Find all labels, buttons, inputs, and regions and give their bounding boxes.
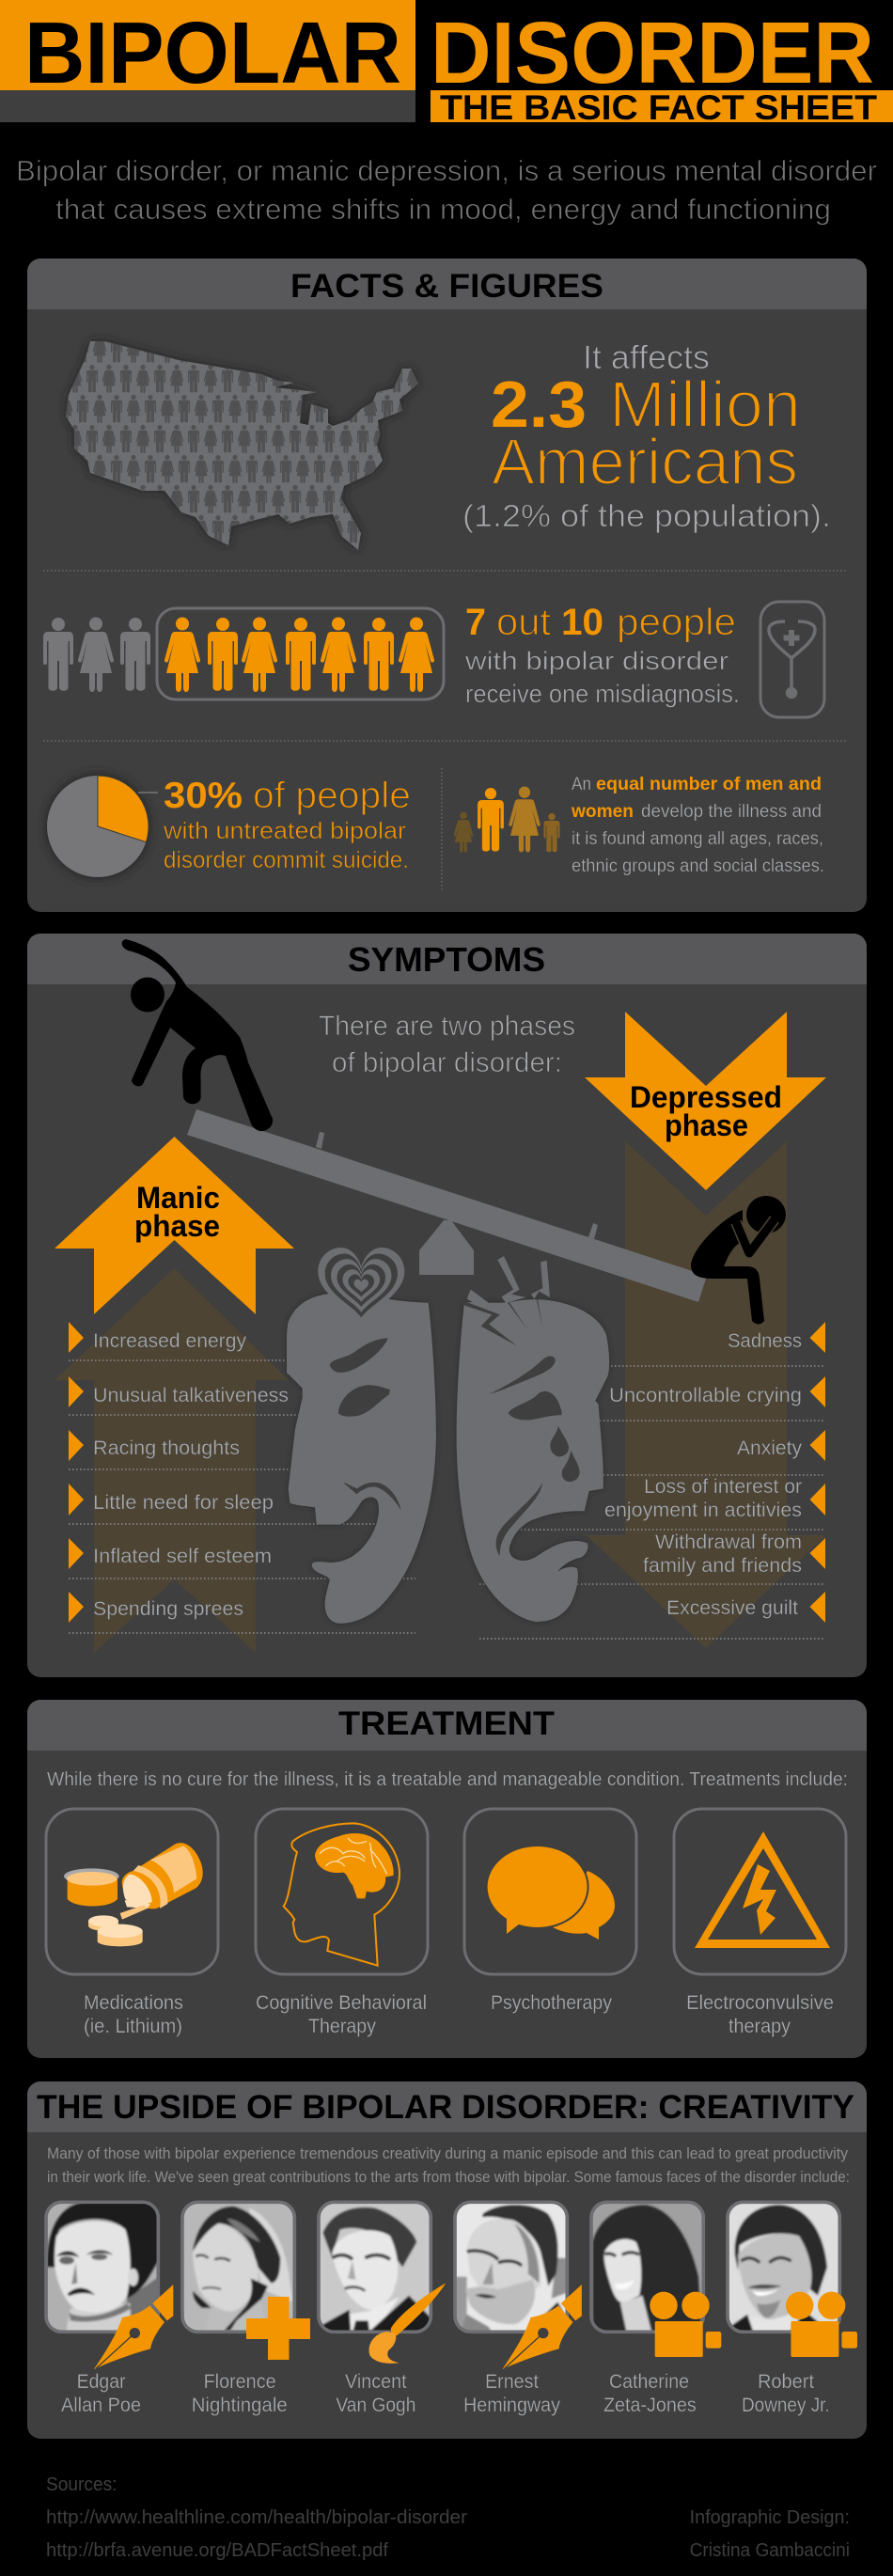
- title word: Bipolar: BIPOLAR: [24, 4, 401, 102]
- footer: sources: [46, 2474, 467, 2561]
- label: psychotherapy: Psychotherapy: [491, 1992, 612, 2014]
- footer: sources: Sources:: [46, 2474, 117, 2495]
- list: depressed symptoms: Excessive guilt: [666, 1597, 798, 1619]
- stat: 2.3 million Americans: 2.3: [491, 368, 587, 441]
- stat: 2.3 million Americans: Million: [609, 368, 801, 441]
- icon: pen nib: [502, 2285, 582, 2369]
- intro text: [16, 154, 877, 226]
- panel: facts and figures: [27, 259, 867, 912]
- list: depressed symptoms: Anxiety: [737, 1437, 802, 1459]
- list: manic symptoms: Inflated self esteem: [93, 1546, 272, 1567]
- label: medications: (ie. Lithium): [84, 2016, 182, 2037]
- label: electroconvulsive therapy: [686, 1992, 834, 2037]
- list: manic symptoms: Increased energy: [93, 1330, 246, 1352]
- stat: misdiagnosis: 7: [465, 602, 486, 643]
- stat: 30 percent suicide: with untreated bipolar: [163, 818, 406, 844]
- text: treatment intro: While there is no cure for the illness, it is a treatable and manageable condition. Treatments include:: [47, 1769, 848, 1790]
- arrow shadow: manic: [55, 1268, 289, 1653]
- list: depressed symptoms: family and friends: [643, 1555, 802, 1577]
- stat: misdiagnosis: 10: [561, 602, 603, 643]
- label: electroconvulsive therapy: therapy: [728, 2016, 791, 2037]
- text: equal number of men and women: develop the illness and: [641, 802, 822, 822]
- footer: credit: Cristina Gambaccini: [690, 2540, 850, 2561]
- list: depressed symptoms: Sadness: [728, 1330, 802, 1352]
- names: Van Gogh: [336, 2395, 415, 2416]
- list: manic symptoms: Spending sprees: [93, 1598, 243, 1620]
- portrait: Edgar Allan Poe: [45, 2202, 159, 2333]
- icon: medical cross: [246, 2297, 310, 2360]
- stat: misdiagnosis: out: [496, 602, 551, 643]
- portrait: Robert Downey Jr.: [727, 2202, 840, 2333]
- names: Zeta-Jones: [603, 2395, 697, 2416]
- list: manic symptoms: Little need for sleep: [93, 1492, 274, 1514]
- footer: sources: http://www.healthline.com/health/bipolar-disorder: [46, 2507, 467, 2528]
- arrow: depressed phase: [585, 1012, 826, 1190]
- text: equal number of men and women: women: [571, 802, 634, 822]
- panel: treatment: [27, 1700, 867, 2058]
- stat: 2.3 million Americans: Americans: [492, 425, 798, 498]
- list: manic symptoms: Racing thoughts: [93, 1437, 240, 1459]
- names: Nightingale: [192, 2395, 288, 2416]
- figure: manic person: [122, 939, 273, 1131]
- list: depressed symptoms: Withdrawal from: [655, 1531, 802, 1553]
- names: Allan Poe: [61, 2395, 141, 2416]
- portrait: Catherine Zeta-Jones: [590, 2202, 704, 2333]
- icon: stethoscope: [760, 602, 824, 717]
- heading: symptoms: SYMPTOMS: [348, 940, 545, 979]
- text: two phases: [319, 1011, 575, 1078]
- list: manic symptoms: Unusual talkativeness: [93, 1385, 289, 1406]
- text: equal number of men and women: [571, 775, 824, 876]
- text: creativity intro: [47, 2144, 850, 2186]
- text: equal number of men and women: ethnic groups and social classes.: [572, 856, 824, 876]
- text: equal number of men and women: equal number of men and: [596, 775, 822, 794]
- icon: pen nib: [94, 2285, 173, 2369]
- footer: credit: [690, 2507, 850, 2561]
- card: electroconvulsive therapy: [674, 1809, 846, 2037]
- icon: pill bottle: [64, 1843, 203, 1946]
- stat: misdiagnosis: receive one misdiagnosis.: [465, 680, 740, 708]
- title word: Disorder: DISORDER: [431, 4, 874, 102]
- icon: movie camera: [650, 2292, 721, 2357]
- list: depressed symptoms: Uncontrollable crying: [609, 1385, 802, 1406]
- label: medications: [84, 1992, 183, 2037]
- card: medications: [46, 1809, 218, 2037]
- arrow: manic phase: phase: [134, 1209, 220, 1243]
- card: psychotherapy: [464, 1809, 636, 2014]
- names: Ernest: [485, 2371, 539, 2393]
- stat: 30 percent suicide: of people: [253, 776, 411, 816]
- footer: credit: Infographic Design:: [690, 2507, 850, 2528]
- portrait: Ernest Hemingway: [454, 2202, 568, 2333]
- names: Vincent: [345, 2371, 407, 2393]
- names: Robert: [758, 2371, 814, 2393]
- arrow: manic phase: [55, 1137, 294, 1314]
- stat: misdiagnosis: with bipolar disorder: [464, 647, 728, 675]
- intro text: Bipolar disorder, or manic depression, is a serious mental disorder: [16, 154, 877, 187]
- icon: head and brain: [284, 1823, 400, 1966]
- label: cognitive behavioral therapy: [256, 1992, 427, 2037]
- stat: 30 percent suicide: disorder commit suicide.: [164, 847, 409, 873]
- figure: depressed person: [691, 1196, 786, 1324]
- portrait: Vincent Van Gogh: [318, 2202, 431, 2333]
- stat: 30 percent suicide: [163, 776, 411, 873]
- stat: 2.3 million Americans: It affects: [583, 339, 710, 376]
- text: equal number of men and women: An: [572, 775, 591, 794]
- stat: 2.3 million Americans: [462, 339, 831, 533]
- icon: speech bubbles: [486, 1845, 615, 1940]
- arrow: depressed phase: Depressed: [630, 1080, 782, 1114]
- arrow: depressed phase: phase: [665, 1108, 748, 1142]
- panel: creativity: [27, 2081, 867, 2439]
- intro text: that causes extreme shifts in mood, energy and functioning: [55, 193, 831, 226]
- names: [61, 2371, 830, 2416]
- footer: sources: http://brfa.avenue.org/BADFactSheet.pdf: [46, 2540, 388, 2561]
- list: depressed symptoms: [604, 1322, 825, 1623]
- header: title banner: [0, 0, 893, 127]
- label: medications: Medications: [84, 1992, 183, 2014]
- label: electroconvulsive therapy: Electroconvulsive: [686, 1992, 834, 2014]
- heading: facts and figures: FACTS & FIGURES: [290, 268, 603, 305]
- names: Edgar: [77, 2371, 126, 2393]
- names: Catherine: [609, 2371, 689, 2393]
- text: equal number of men and women: it is found among all ages, races,: [572, 829, 823, 849]
- portrait: Florence Nightingale: [181, 2202, 295, 2333]
- list: manic symptoms: [69, 1322, 289, 1623]
- list: depressed symptoms: Loss of interest or: [644, 1476, 802, 1498]
- seesaw: [187, 1109, 707, 1302]
- text: two phases: There are two phases: [319, 1011, 575, 1042]
- label: cognitive behavioral therapy: Cognitive Behavioral: [256, 1992, 427, 2014]
- text: two phases: of bipolar disorder:: [332, 1047, 562, 1078]
- heading: treatment: TREATMENT: [338, 1705, 555, 1742]
- names: Hemingway: [463, 2395, 560, 2416]
- text: creativity intro: Many of those with bipolar experience tremendous creativity during a manic episode and this can lead to great productivity: [47, 2144, 848, 2162]
- card: cognitive behavioral therapy: [256, 1809, 428, 2037]
- mask: comedy: [287, 1293, 436, 1624]
- names: Downey Jr.: [742, 2395, 830, 2416]
- pictogram: 7 of 10 people: [43, 608, 444, 699]
- subtitle: THE BASIC FACT SHEET: [440, 88, 877, 127]
- icon: high voltage triangle: [695, 1831, 830, 1948]
- heading: creativity: THE UPSIDE OF BIPOLAR DISORDER: CREATIVITY: [37, 2089, 854, 2126]
- icon: movie camera: [786, 2292, 857, 2357]
- panel: symptoms: [27, 934, 867, 1677]
- names: Florence: [204, 2371, 276, 2393]
- list: depressed symptoms: enjoyment in actitivies: [604, 1500, 802, 1521]
- icon: family: [454, 787, 559, 853]
- icon: layered heart: [318, 1248, 404, 1324]
- chart: 30 percent pie: [45, 774, 158, 879]
- icon: paint brush: [369, 2283, 446, 2364]
- stat: misdiagnosis: people: [617, 602, 736, 643]
- stat: 2.3 million Americans: (1.2% of the population).: [462, 498, 831, 533]
- stat: misdiagnosis: [464, 602, 740, 708]
- arrow shadow: depressed: [587, 1141, 826, 1648]
- label: cognitive behavioral therapy: Therapy: [308, 2016, 376, 2037]
- stat: 30 percent suicide: 30%: [164, 776, 243, 816]
- mask: tragedy: [457, 1256, 609, 1622]
- map: USA made of people: [66, 341, 418, 550]
- arrow: manic phase: Manic: [136, 1181, 220, 1215]
